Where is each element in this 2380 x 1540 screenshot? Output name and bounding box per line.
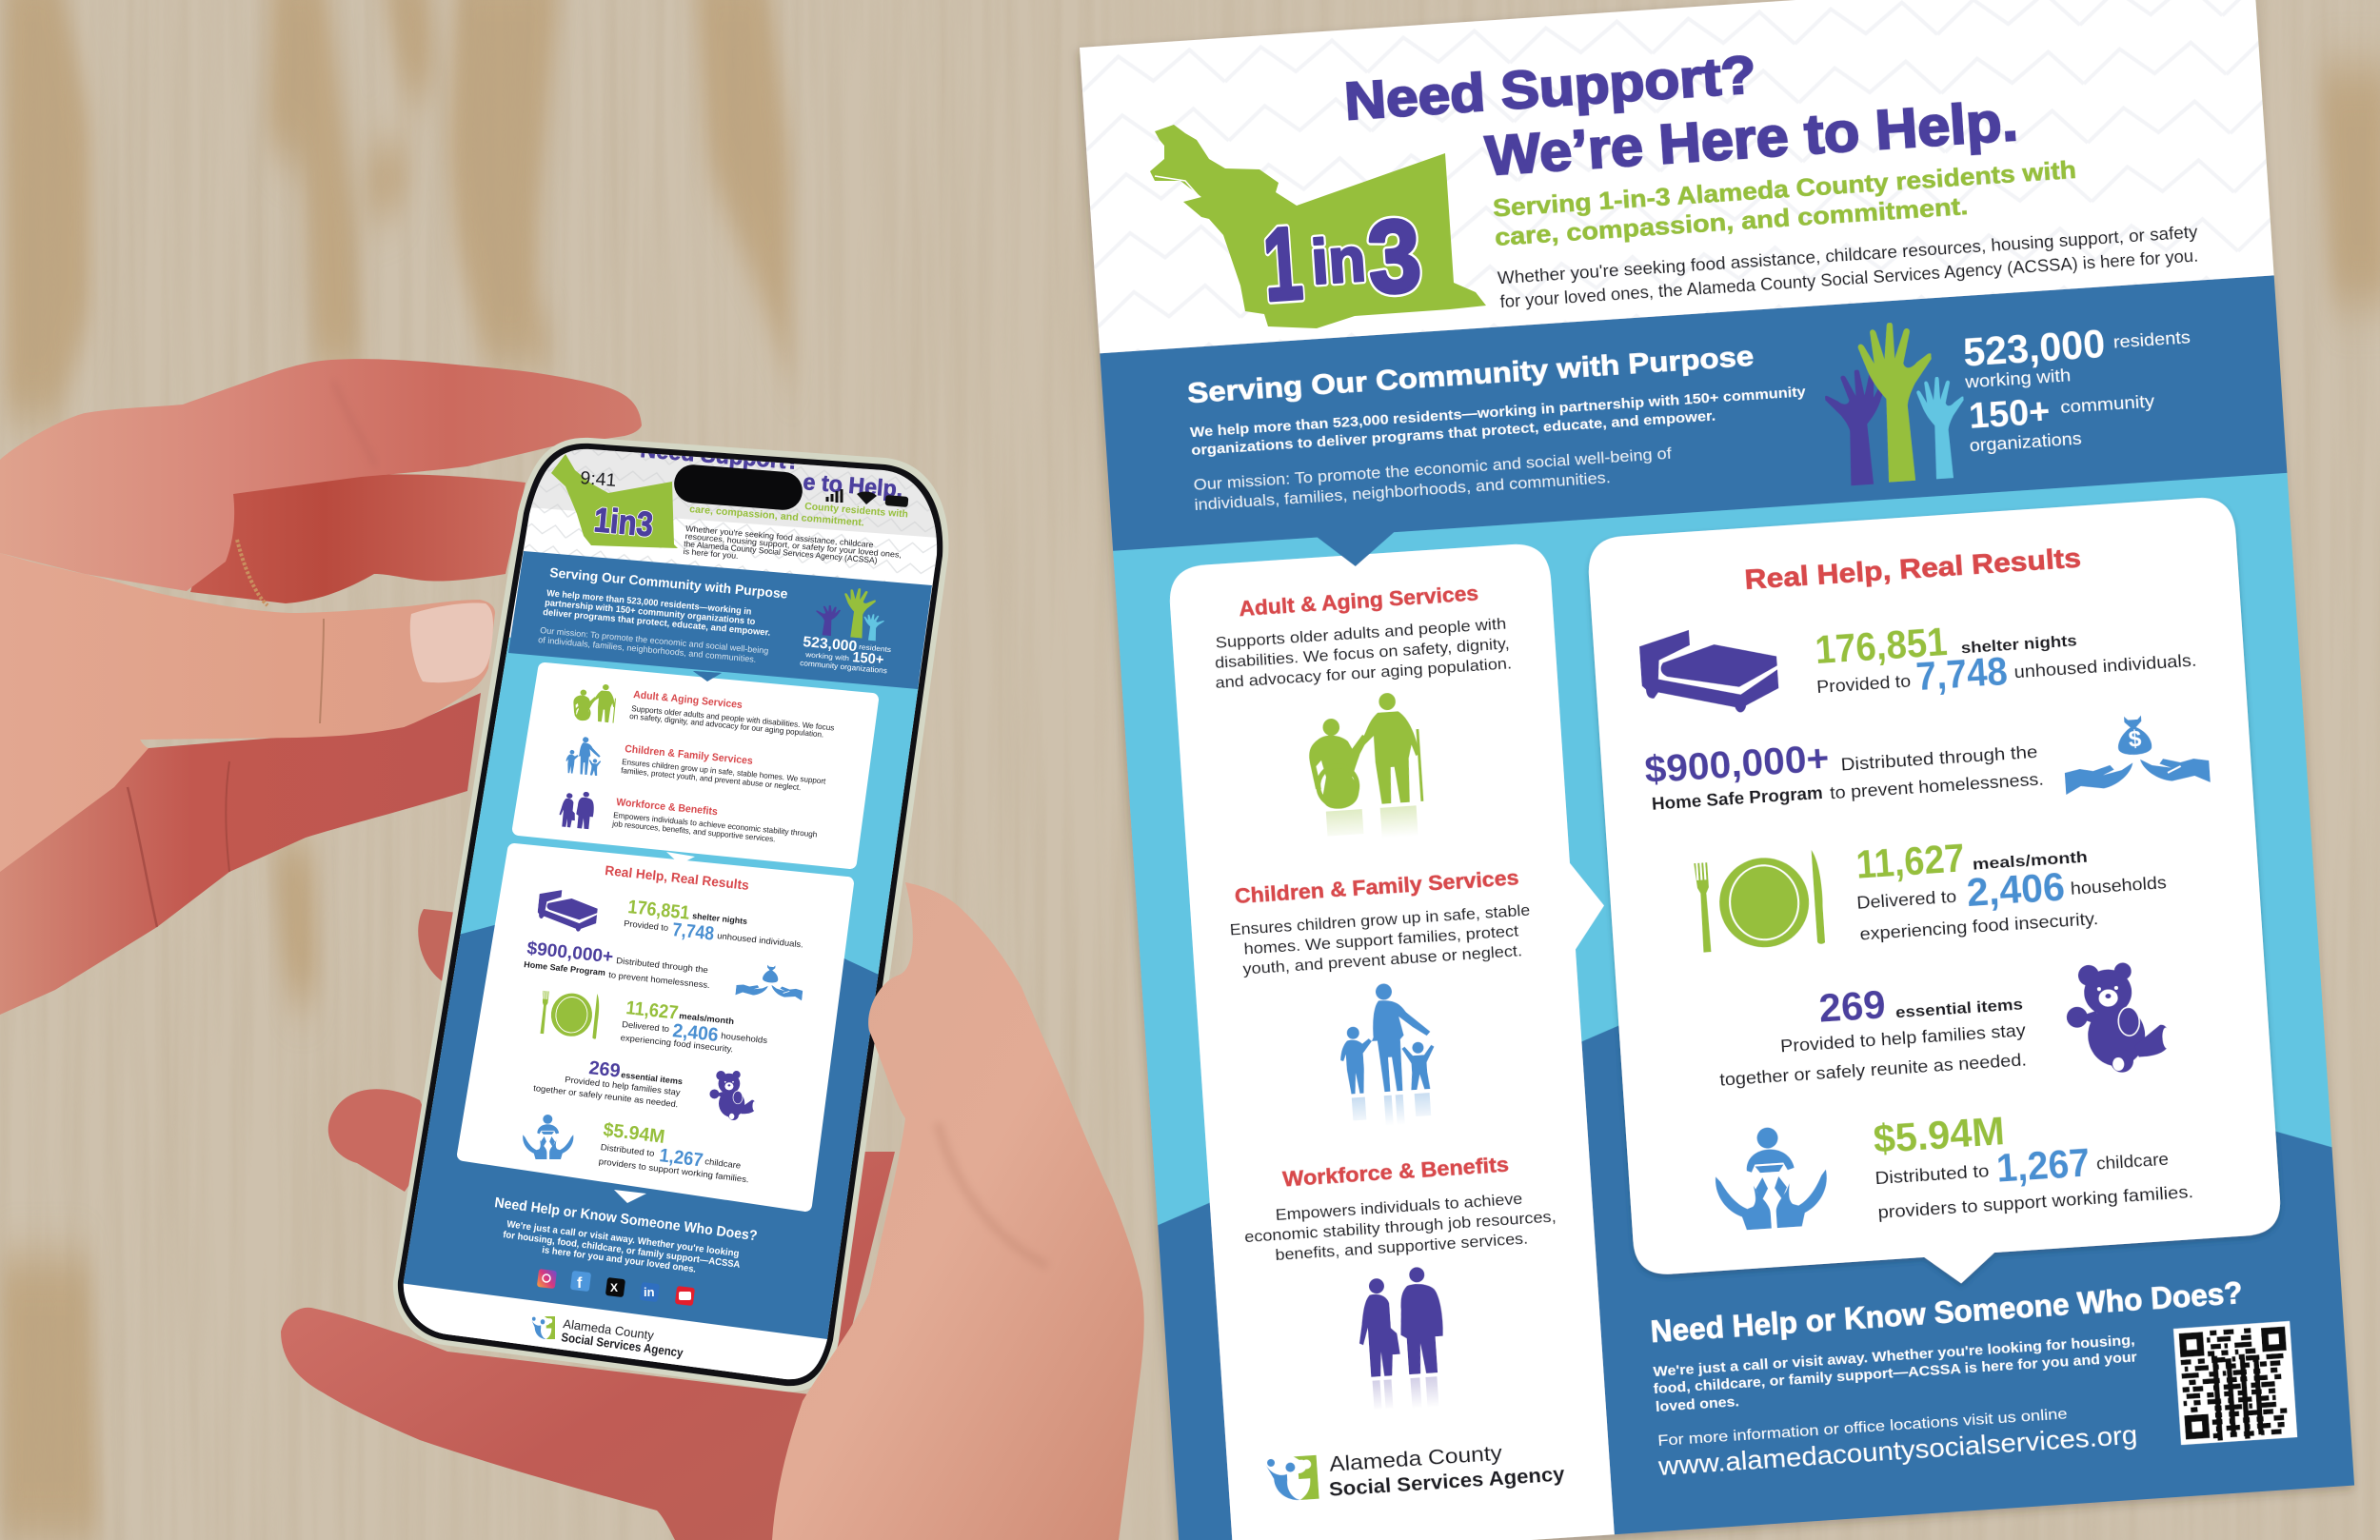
service: workforce and benefits <box>1240 1150 1568 1419</box>
phone: call to action <box>493 1194 758 1275</box>
phone: services card: job resources, benefits, and supportive services. <box>611 819 776 843</box>
phone: results card: Provided to help families stay <box>565 1075 682 1097</box>
stats: residents and organizations: working with <box>1964 365 2072 392</box>
result: childcare: childcare <box>2095 1150 2170 1174</box>
icon: thumb nail <box>410 603 493 682</box>
phone: top map: 1in3 <box>592 500 655 543</box>
index finger and back of hand <box>0 359 642 591</box>
phone: call to action: is here for you and your loved ones. <box>542 1245 697 1275</box>
panel: services <box>1167 540 1646 1540</box>
text: 1in3: in <box>1309 224 1368 297</box>
logo: agency: Social Services Agency <box>1328 1464 1566 1501</box>
phone: community band: Serving Our Community with Purpose <box>549 564 788 602</box>
result: meals: households <box>2070 873 2167 898</box>
result: meals: 2,406 <box>1965 863 2066 915</box>
result: home safe program <box>1643 711 2211 822</box>
phone: services card: Supports older adults and people with disabilities. We focus <box>631 703 835 733</box>
phone: social icons: in <box>644 1285 655 1299</box>
call to action: loved ones. <box>1656 1394 1739 1415</box>
intro text: Whether you're seeking food assistance, childcare resources, housing support, or safety <box>1497 223 2198 287</box>
phone: results card: 1,267 <box>658 1145 704 1172</box>
icon: money in hands <box>2061 711 2211 795</box>
subtitle: care, compassion, and commitment. <box>1494 191 1969 251</box>
result: essential items: essential items <box>1894 996 2023 1021</box>
service: children and family: homes. We support families, protect <box>1243 922 1519 958</box>
phone: community band: Our mission: To promote the economic and social well-being <box>540 625 769 656</box>
call to action: www.alamedacountysocialservices.org <box>1656 1420 2138 1481</box>
phone: results card: Distributed to <box>600 1142 655 1158</box>
phone: logo: Social Services Agency <box>561 1330 684 1360</box>
phone: results card: experiencing food insecurity. <box>620 1033 734 1054</box>
text: 1in3: 1 <box>1260 205 1305 323</box>
band heading: serving our community: individuals, families, neighborhoods, and communities. <box>1194 468 1611 514</box>
text: 1in3: 1 <box>1260 205 1305 323</box>
result: meals: meals/month <box>1972 848 2088 874</box>
service: workforce and benefits: Empowers individuals to achieve <box>1275 1191 1523 1224</box>
phone: results card: 176,851 <box>626 897 690 924</box>
phone: services card: Empowers individuals to achieve economic stability through <box>613 810 818 839</box>
phone: results card: households <box>721 1031 768 1045</box>
result: childcare: Distributed to <box>1874 1161 1990 1188</box>
service: children and family: Ensures children grow up in safe, stable <box>1229 902 1531 939</box>
phone: title: Need Support? <box>640 437 801 475</box>
call to action <box>1648 1275 2252 1481</box>
lower fingers of upper hand <box>0 693 481 1015</box>
phone: services card: Adult & Aging Services <box>633 689 743 711</box>
phone: community band: community organizations <box>800 659 887 675</box>
phone: title <box>641 453 908 525</box>
result: shelter nights: unhoused individuals. <box>2013 651 2197 681</box>
result: shelter nights: 176,851 <box>1814 619 1949 672</box>
middle finger <box>190 474 526 603</box>
poster: printed flyer <box>1080 0 2354 1540</box>
result: essential items: 269 <box>1817 981 1887 1031</box>
phone: results card: together or safely reunite as needed. <box>533 1083 679 1109</box>
service: children and family: Children & Family Services <box>1234 865 1519 908</box>
phone: results card: $5.94M <box>602 1119 666 1148</box>
thumb <box>0 553 495 872</box>
phone: community band: working with <box>804 650 849 662</box>
result: childcare: 1,267 <box>1995 1139 2092 1191</box>
band heading: serving our community: We help more than 523,000 residents—working in partnership with 150+ community <box>1190 384 1807 441</box>
phone: intro: Whether you're seeking food assistance, childcare <box>685 523 874 549</box>
service: adult and aging: Supports older adults and people with <box>1215 616 1507 652</box>
band heading: serving our community: Serving Our Community with Purpose <box>1186 341 1755 409</box>
logo: agency <box>1265 1437 1566 1505</box>
phone: call to action: We're just a call or visit away. Whether you're looking <box>506 1219 740 1259</box>
phone: intro: is here for you. <box>683 546 739 561</box>
phone: intro: resources, housing support, or safety for your loved ones, <box>684 531 902 560</box>
phone: results card: Real Help, Real Results <box>605 862 750 893</box>
title: Need Support? <box>1342 44 1757 131</box>
icon: raised hands <box>1819 318 1970 487</box>
upper left hand <box>0 359 642 1015</box>
icon: money in hands: $ <box>2128 726 2143 753</box>
call to action: We're just a call or visit away. Whether you're looking for housing, <box>1653 1333 2135 1380</box>
stats: residents and organizations: 523,000 <box>1962 321 2106 375</box>
result: essential items <box>1714 960 2172 1099</box>
logo: agency: Alameda County <box>1328 1441 1503 1476</box>
service: workforce and benefits: economic stability through job resources, <box>1244 1209 1557 1246</box>
text: 1in3 <box>1260 197 1424 323</box>
phone: results card: 7,748 <box>671 919 715 945</box>
phone: social icons: X <box>610 1281 618 1294</box>
phone: results card: meals/month <box>679 1011 735 1026</box>
phone: results card: Delivered to <box>622 1019 670 1034</box>
text: 1in3: 3 <box>1364 197 1424 315</box>
result: shelter nights <box>1638 597 2198 719</box>
phone: results card: 269 <box>587 1057 622 1082</box>
band heading: serving our community: organizations to deliver programs that protect, educate, and empower. <box>1191 408 1716 459</box>
phone: dynamic island <box>673 464 803 511</box>
result: home safe program: Distributed through the <box>1840 742 2038 775</box>
phone: services card: Workforce & Benefits <box>616 797 718 818</box>
service: adult and aging: disabilities. We focus on safety, dignity, <box>1215 635 1510 672</box>
band heading: serving our community: Our mission: To promote the economic and social well-being of <box>1193 444 1673 494</box>
phone: community band: 523,000 <box>803 634 858 655</box>
phone: social icons: f <box>577 1275 583 1292</box>
phone: results card: essential items <box>621 1070 684 1086</box>
call to action: Need Help or Know Someone Who Does? <box>1650 1275 2244 1349</box>
title <box>1342 27 2019 196</box>
phone: status bar: 9:41 <box>580 468 617 491</box>
service: children and family: youth, and prevent abuse or neglect. <box>1242 942 1523 978</box>
intro text: for your loved ones, the Alameda County Social Services Agency (ACSSA) is here for you. <box>1499 247 2199 311</box>
result: essential items: Provided to help families stay <box>1780 1020 2026 1056</box>
phone screen <box>404 449 937 1380</box>
subtitle: Serving 1-in-3 Alameda County residents with <box>1492 155 2077 223</box>
phone: results card: providers to support working families. <box>598 1156 749 1184</box>
result: shelter nights: 7,748 <box>1914 648 2009 699</box>
phone: intro: the Alameda County Social Services Agency (ACSSA) <box>684 539 878 565</box>
title: We’re Here to Help. <box>1483 90 2019 188</box>
phone: title: County residents with <box>804 501 908 521</box>
result: meals: 11,627 <box>1854 835 1966 887</box>
phone: results card: to prevent homelessness. <box>608 970 710 990</box>
phone: results card: 11,627 <box>625 997 679 1024</box>
phone: services card: Ensures children grow up in safe, stable homes. We support <box>622 757 826 786</box>
result: shelter nights: shelter nights <box>1960 631 2077 657</box>
phone: top map: 1in3 <box>592 500 655 543</box>
text: 1in3: in <box>1309 224 1368 297</box>
phone: logo: Alameda County <box>563 1316 655 1343</box>
phone with mobile infographic <box>381 428 962 1399</box>
phone: community band: We help more than 523,000 residents—working in <box>546 588 752 618</box>
phone: title: care, compassion, and commitment. <box>689 503 864 528</box>
result: home safe program: Home Safe Program <box>1651 783 1823 814</box>
service: adult and aging: and advocacy for our aging population. <box>1215 655 1513 692</box>
result: meals: Delivered to <box>1856 887 1957 913</box>
stats: residents and organizations <box>1961 315 2197 456</box>
panel: real results <box>1586 496 2284 1305</box>
service: workforce and benefits: Workforce & Benefits <box>1281 1153 1510 1191</box>
icon: family <box>1336 980 1439 1129</box>
phone: social icons <box>537 1269 695 1306</box>
result: home safe program: $900,000+ <box>1643 737 1831 791</box>
result: essential items: together or safely reunite as needed. <box>1719 1050 2027 1090</box>
service: children and family <box>1227 865 1543 1135</box>
phone: results card <box>464 850 847 1205</box>
phone: services card <box>519 669 872 862</box>
service: workforce and benefits: benefits, and supportive services. <box>1275 1231 1529 1264</box>
lower hand and thumb in front of phone <box>772 882 1144 1540</box>
result: meals <box>1694 821 2170 955</box>
phone: services card: on safety, dignity, and advocacy for our aging population. <box>629 711 824 740</box>
stats: residents and organizations: 150+ <box>1968 391 2051 437</box>
stats: residents and organizations: organizations <box>1969 429 2082 456</box>
phone: community band: residents <box>859 642 892 654</box>
lower fingers behind phone <box>281 909 895 1540</box>
result: childcare: providers to support working families. <box>1877 1182 2194 1222</box>
phone: results card: Distributed through the <box>616 956 708 975</box>
creases and ring <box>128 381 376 927</box>
phone: intro <box>683 523 902 565</box>
phone: community band: deliver programs that protect, educate, and empower. <box>543 607 771 639</box>
result: home safe program: to prevent homelessness. <box>1830 770 2044 802</box>
county map with 1 in 3 <box>1150 125 1486 328</box>
phone: results card: $900,000+ <box>526 938 614 967</box>
phone: results card: childcare <box>704 1156 742 1171</box>
qr code <box>2173 1321 2297 1445</box>
text: 1in3: 3 <box>1364 197 1424 315</box>
phone: call to action: for housing, food, childcare, or family support—ACSSA <box>503 1230 741 1271</box>
phone: community band: 150+ <box>852 649 884 668</box>
phone: community band <box>538 564 892 675</box>
service: adult and aging: Adult & Aging Services <box>1239 582 1479 621</box>
phone: services card: Children & Family Services <box>625 743 753 767</box>
result: childcare: $5.94M <box>1872 1108 2006 1161</box>
result: childcare <box>1712 1096 2194 1233</box>
heading: real help: Real Help, Real Results <box>1744 543 2082 596</box>
phone: results card: shelter nights <box>692 911 748 926</box>
phone: top map <box>551 454 678 548</box>
phone: logo <box>531 1316 684 1360</box>
phone: results card: Home Safe Program <box>524 959 606 977</box>
phone: status bar <box>580 468 908 507</box>
result: meals: experiencing food insecurity. <box>1859 909 2099 944</box>
phone: community band: partnership with 150+ community organizations to <box>545 598 756 627</box>
phone: services card: families, protect youth, and prevent abuse or neglect. <box>621 765 802 792</box>
call to action: food, childcare, or family support—ACSSA is here for you and your <box>1653 1350 2138 1397</box>
band heading: serving our community <box>1186 337 1812 514</box>
phone: results card: unhoused individuals. <box>717 931 803 950</box>
call to action: For more information or office locations visit us online <box>1657 1406 2068 1450</box>
icon: working couple <box>1355 1266 1448 1412</box>
icon: wheelchair and elder <box>1305 691 1426 842</box>
subtitle <box>1492 155 2079 251</box>
phone: call to action: Need Help or Know Someone Who Does? <box>493 1194 758 1244</box>
stats: residents and organizations: community <box>2060 391 2155 417</box>
phone: results card: Provided to <box>624 918 669 933</box>
phone: title: e to Help. <box>803 469 903 503</box>
phone: community band: of individuals, families, neighborhoods, and communities. <box>538 635 757 664</box>
phone: results card: 2,406 <box>671 1020 720 1046</box>
result: shelter nights: Provided to <box>1816 672 1912 697</box>
service: adult and aging <box>1210 580 1522 849</box>
stats: residents and organizations: residents <box>2112 327 2191 352</box>
